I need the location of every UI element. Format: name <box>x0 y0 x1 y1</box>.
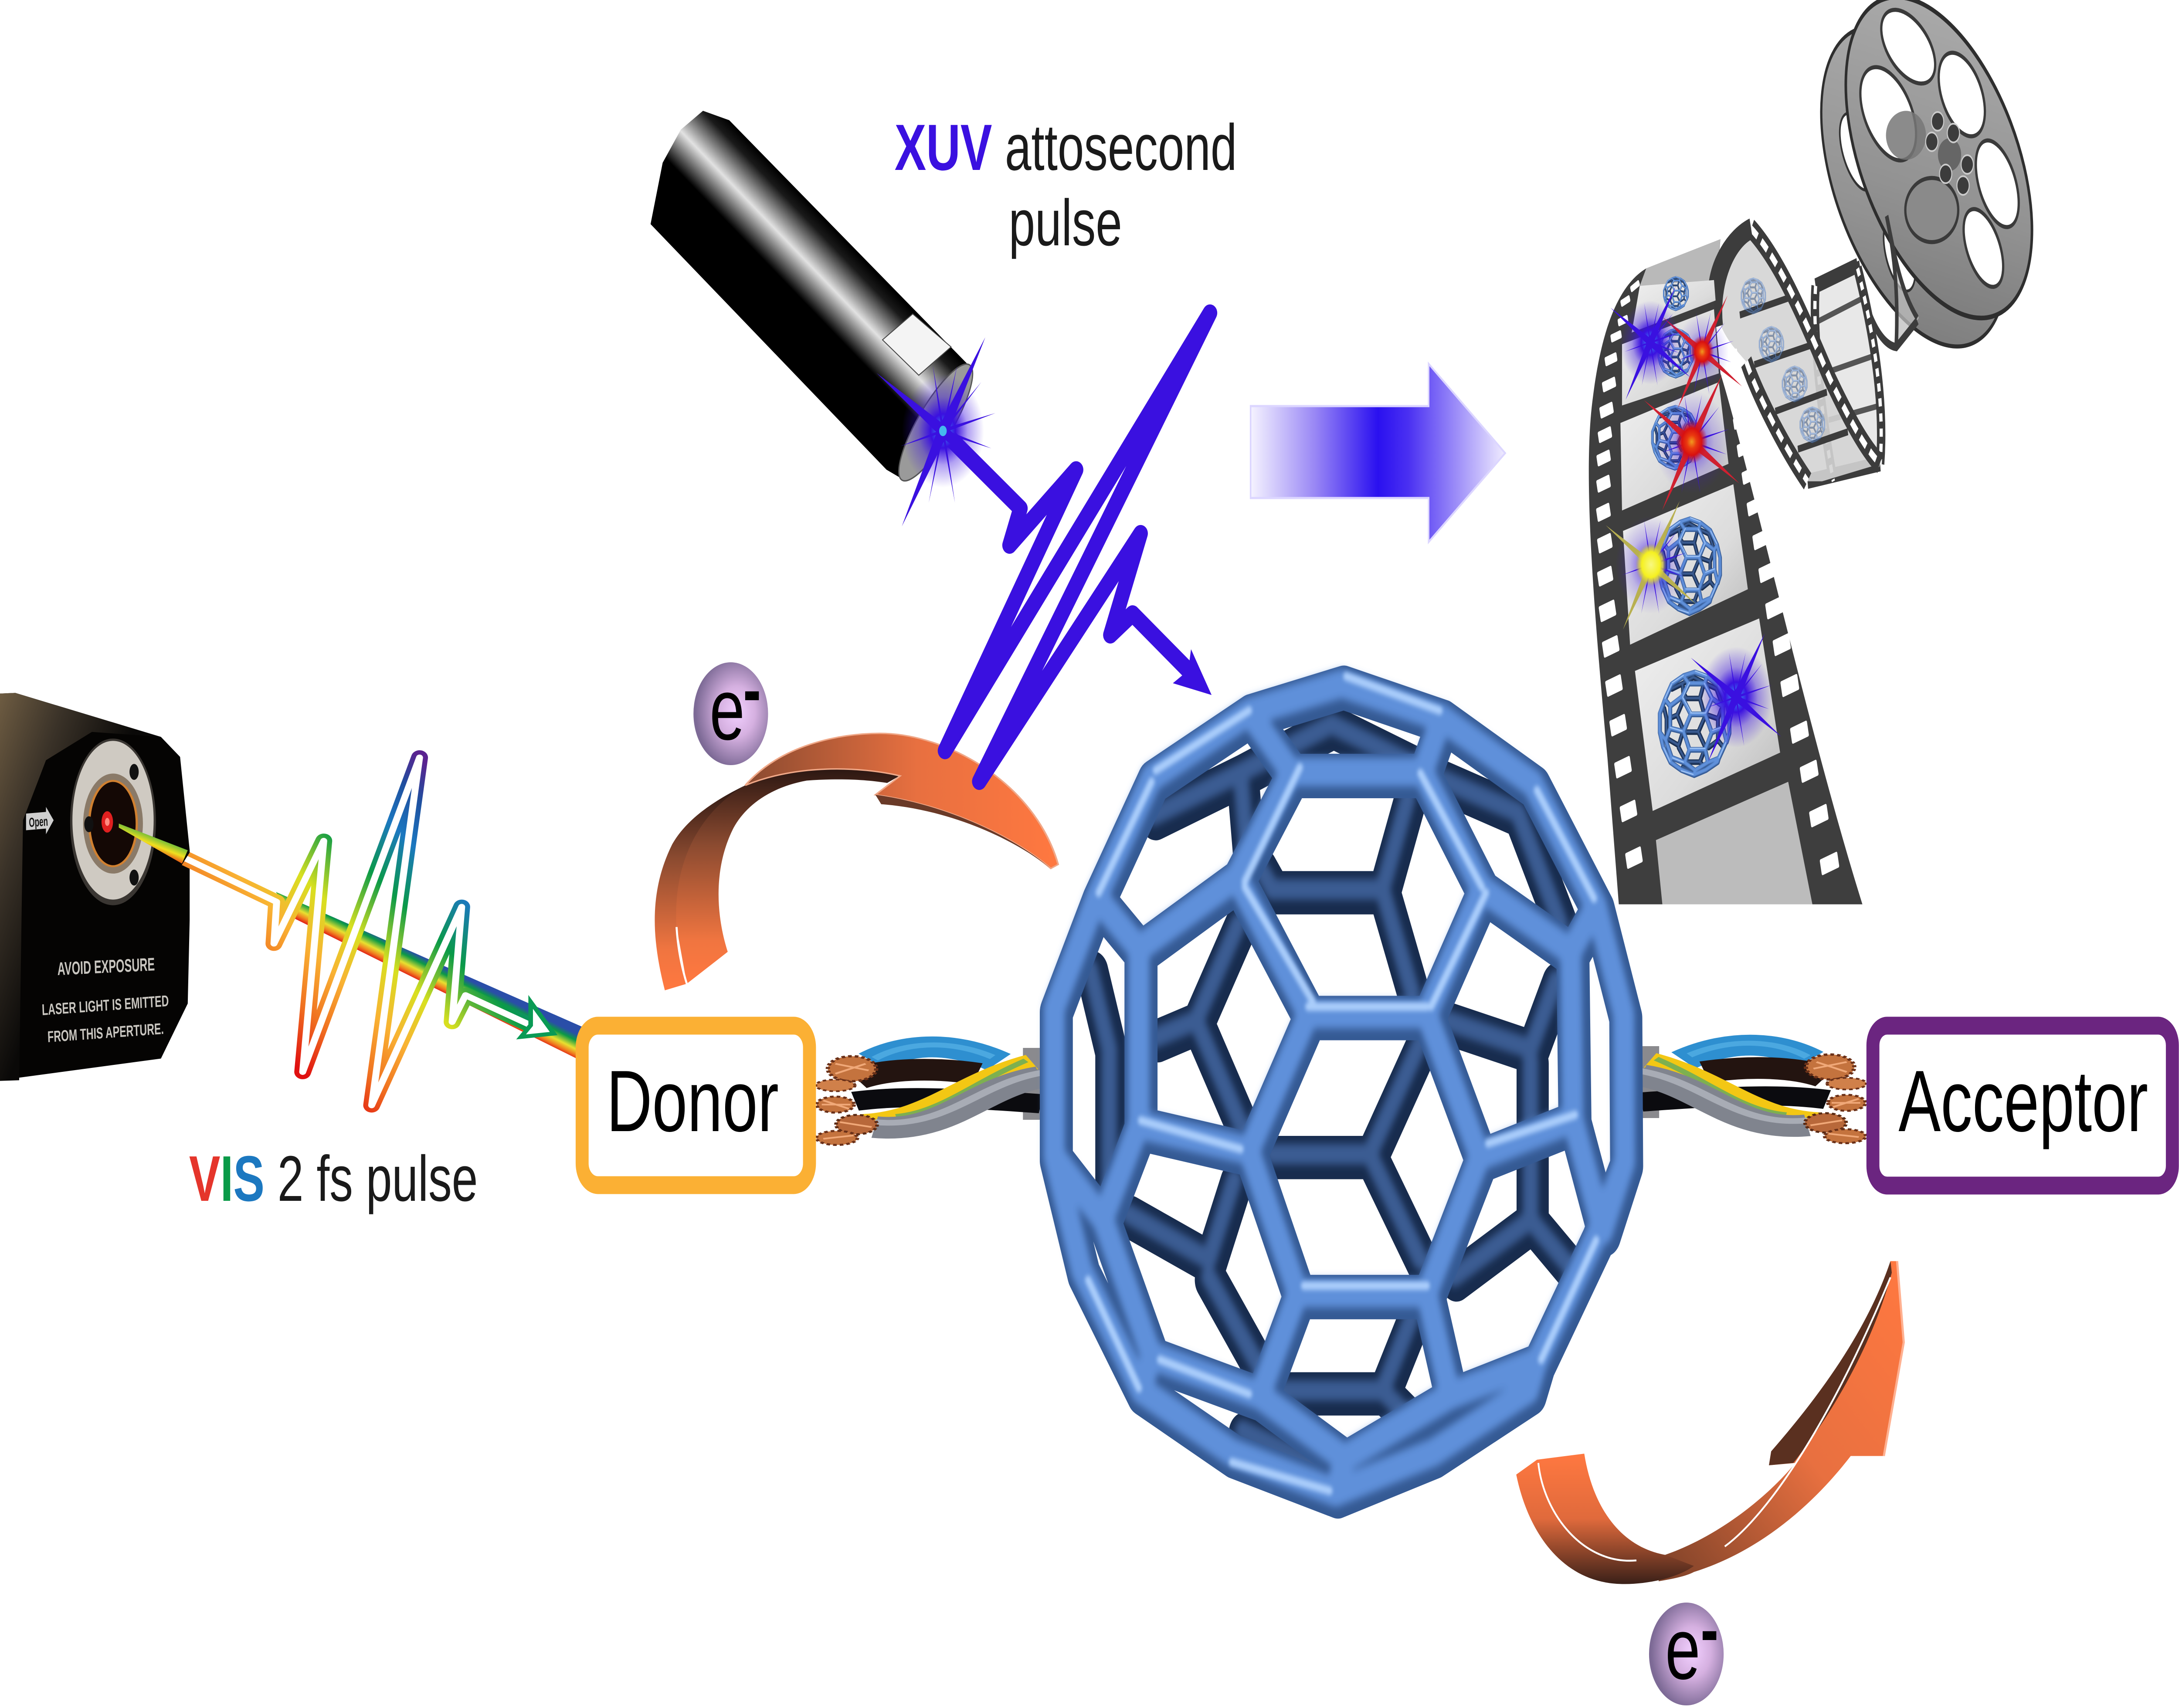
VIS label: VIS 2 fs pulse <box>189 1143 478 1215</box>
donor box <box>582 1026 809 1185</box>
film strip: faded fullerene frames <box>1741 278 1825 442</box>
acceptor box <box>1873 1026 2172 1186</box>
film reel <box>1788 0 2065 408</box>
film strip: loop to reel <box>1808 216 1919 481</box>
rainbow beam from VIS laser <box>276 892 586 1058</box>
film frames: fullerenes <box>1652 277 1729 775</box>
electron: upper: - <box>743 649 761 731</box>
VIS laser housing <box>0 693 190 1081</box>
electron: lower <box>1649 1589 1724 1705</box>
film flash: red frame 3 <box>1644 374 1740 511</box>
XUV source flash <box>876 337 1009 526</box>
acceptor box: Acceptor <box>1898 1053 2148 1150</box>
XUV label <box>895 111 1237 259</box>
XUV label: pulse <box>1009 186 1122 259</box>
arrow: electron to acceptor <box>1516 1261 1904 1584</box>
arrow: blue gradient <box>1251 364 1505 542</box>
laser label: warning text: FROM THIS APERTURE. <box>47 1020 164 1046</box>
fullerene molecule <box>1054 676 1627 1496</box>
electron: lower: - <box>1700 1589 1718 1671</box>
film strip: main band <box>1589 229 1863 904</box>
VIS 2 fs pulse waveform <box>119 758 553 1105</box>
donor box: Donor <box>607 1053 779 1150</box>
film flash: red frame 2 <box>1662 295 1742 409</box>
film flash: yellow frame 4 <box>1606 501 1696 630</box>
electron: upper <box>693 649 768 765</box>
XUV laser tube <box>651 111 984 491</box>
film strip: rear band <box>1717 227 1880 481</box>
XUV pulse waveform <box>943 313 1212 781</box>
electron: lower: e <box>1665 1600 1700 1698</box>
laser label: warning text: LASER LIGHT IS EMITTED <box>41 992 169 1019</box>
cable: donor wires <box>816 1045 1041 1145</box>
XUV label: attosecond <box>1005 111 1237 184</box>
laser label: warning text: AVOID EXPOSURE <box>57 954 155 979</box>
film flash: blue frame 5 <box>1691 634 1781 762</box>
laser label: Open: Open <box>29 813 48 830</box>
laser label: warning text <box>41 954 169 1046</box>
film flash: blue frame 2 <box>1610 286 1690 400</box>
electron: upper: e <box>709 661 745 758</box>
cable: acceptor wires <box>1641 1043 1867 1143</box>
arrow: electron from donor <box>655 733 1058 990</box>
XUV label: XUV <box>895 111 992 184</box>
